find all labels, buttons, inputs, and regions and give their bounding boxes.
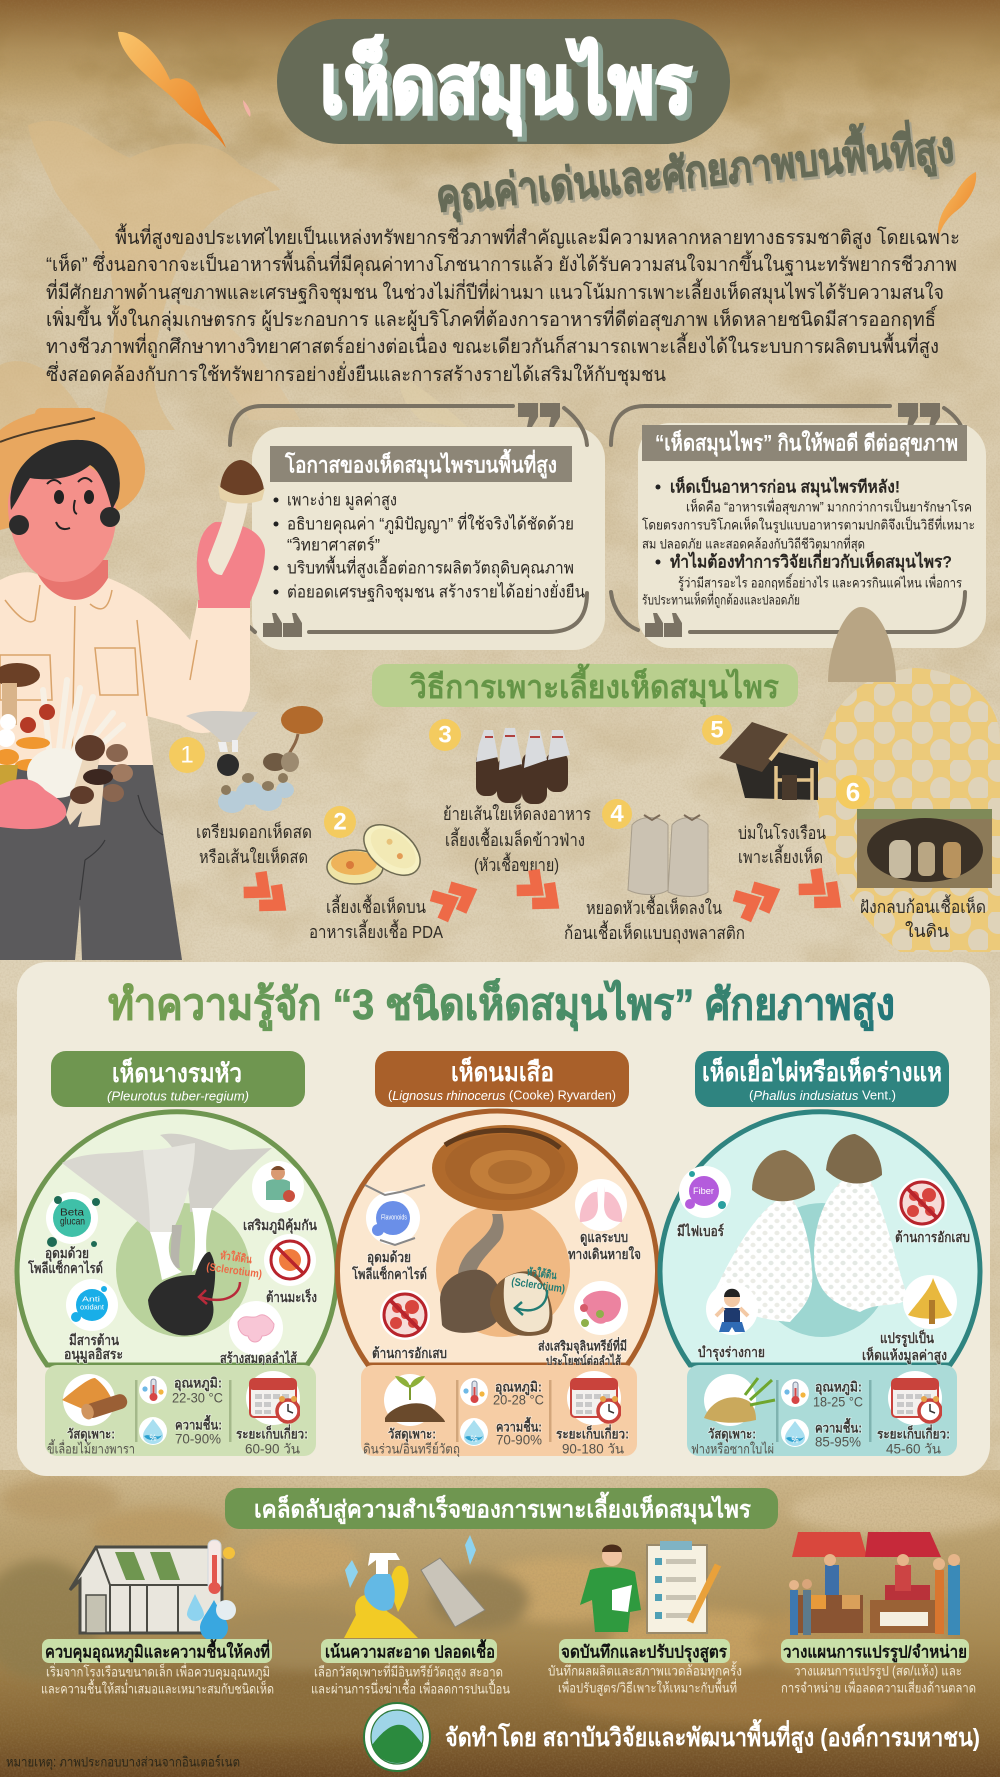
arrow 5	[799, 869, 843, 912]
number badge	[169, 737, 205, 773]
intro paragraph: ที่มีศักยภาพด้านสุขภาพและเศรษฐกิจชุมชน ในช่วงไม่กี่ปีที่ผ่านมา แนวโน้มการเพาะเลี้ยงเห็ดสมุนไพรได้รับความสนใจ	[46, 278, 944, 305]
benefit: antioxidant: มีสารต้าน	[69, 1332, 119, 1348]
tip 3: records	[548, 1541, 742, 1696]
quote marks bottom	[645, 613, 682, 637]
panel heading	[642, 425, 967, 461]
humidity	[781, 1418, 862, 1450]
number badge	[602, 799, 632, 829]
trousers	[0, 765, 182, 960]
sclerotium label: (Sclerotium)	[511, 1276, 566, 1296]
step 4	[564, 799, 745, 944]
benefit: antioxidant: อนุมูลอิสระ	[64, 1346, 123, 1363]
card header	[695, 1051, 949, 1107]
sclerotium label: หัวใต้ดิน	[526, 1264, 558, 1282]
benefit: fiber: Fiber	[693, 1186, 714, 1196]
benefit: anti-inflammatory: ต้านการอักเสบ	[895, 1229, 970, 1245]
panel: three high-potential mushrooms	[17, 962, 990, 1476]
step label: (หัวเชื้อขยาย)	[474, 852, 559, 875]
benefit: antioxidant: oxidant	[80, 1304, 104, 1312]
harvest period	[877, 1371, 950, 1456]
bullet list: ต่อยอดเศรษฐกิจชุมชน สร้างรายได้อย่างยั่งยืน	[287, 580, 585, 602]
circle illustration	[17, 1112, 337, 1365]
benefit: polysaccharide: โพลีแซ็กคาไรด์	[351, 1265, 427, 1282]
step label: เลี้ยงเชื้อเมล็ดข้าวฟ่าง	[445, 827, 585, 850]
card header	[51, 1051, 305, 1107]
spawn bottles	[476, 728, 570, 804]
number badge: 5	[710, 716, 724, 744]
card: Lignosus rhinocerus	[338, 1051, 658, 1458]
method heading: วิธีการเพาะเลี้ยงเห็ดสมุนไพร	[409, 663, 779, 708]
substrate: ดินร่วน/อินทรีย์วัตถุ	[363, 1440, 460, 1458]
quote marks bottom	[263, 613, 302, 637]
step label: เพาะเลี้ยงเห็ด	[738, 844, 823, 867]
benefit: body nourishment	[698, 1283, 765, 1361]
humidity: ความชื้น:	[815, 1418, 862, 1436]
step label: หยอดหัวเชื้อเห็ดลงใน	[586, 895, 722, 918]
sclerotium label	[206, 1246, 265, 1281]
description: บันทึกผลผลิตและสภาพแวดล้อมทุกครั้ง	[548, 1660, 742, 1680]
growing conditions	[361, 1365, 637, 1458]
humidity: 70-90%	[496, 1432, 542, 1448]
temperature: 18-25 °C	[813, 1394, 863, 1410]
tip 4: market planning	[781, 1532, 976, 1696]
label: เน้นความสะอาด ปลอดเชื้อ	[325, 1638, 495, 1662]
icon: greenhouse	[70, 1540, 236, 1641]
description: และผ่านการนึ่งฆ่าเชื้อ เพื่อลดการปนเปื้อน	[311, 1678, 510, 1696]
title pill	[277, 19, 730, 144]
body text	[642, 474, 975, 608]
shirt	[0, 572, 250, 772]
panel heading	[270, 446, 572, 482]
benefit: anti-inflammatory	[372, 1290, 447, 1361]
description: วางแผนการแปรรูป (สด/แห้ง) และ	[794, 1664, 962, 1680]
panel: eat herbal mushrooms properly	[611, 403, 986, 682]
step label: อาหารเลี้ยงเชื้อ PDA	[309, 919, 443, 942]
harvest period: 60-90 วัน	[245, 1442, 300, 1456]
card: Phallus indusiatus	[660, 1051, 980, 1456]
growing conditions	[45, 1365, 316, 1456]
quote marks top	[518, 403, 560, 427]
benefit: antioxidant	[64, 1279, 123, 1363]
sclerotium label	[511, 1262, 568, 1296]
benefit: lungs	[568, 1179, 641, 1262]
step label	[564, 895, 745, 944]
step label	[309, 894, 443, 942]
temperature: อุณหภูมิ:	[174, 1376, 222, 1392]
bullet list: เพาะง่าย มูลค่าสูง	[287, 490, 397, 510]
benefit: polysaccharide: โพลีแซ็กคาไรด์	[27, 1259, 103, 1276]
benefit: gut microbes: ประโยชน์ต่อลำไส้	[546, 1352, 621, 1368]
benefit: polysaccharide: อุดมด้วย	[45, 1245, 89, 1262]
benefit: anti-inflammatory: ต้านการอักเสบ	[372, 1345, 447, 1361]
benefit: body nourishment: บำรุงร่างกาย	[698, 1344, 765, 1361]
circle illustration	[338, 1111, 658, 1365]
benefit: fiber: มีไฟเบอร์	[677, 1222, 724, 1239]
step label	[196, 821, 312, 867]
tips heading: เคล็ดลับสู่ความสำเร็จของการเพาะเลี้ยงเห็ดสมุนไพร	[254, 1490, 751, 1526]
tips heading	[225, 1488, 778, 1529]
step label: ฝังกลบก้อนเชื้อเห็ด	[860, 894, 986, 917]
step 6	[836, 775, 992, 941]
temperature: 22-30 °C	[172, 1390, 223, 1406]
spawn bags	[628, 815, 708, 896]
step label: ย้ายเส้นใยเห็ดลงอาหาร	[443, 803, 591, 824]
step label: ก้อนเชื้อเห็ดแบบถุงพลาสติก	[564, 920, 745, 944]
substrate: วัสดุเพาะ:	[67, 1426, 115, 1442]
step 2	[309, 806, 443, 942]
description: เพื่อปรับสูตร/วิธีเพาะให้เหมาะกับพื้นที่	[558, 1678, 737, 1696]
temperature: อุณหภูมิ:	[815, 1380, 862, 1396]
hand holding a mushroom	[197, 460, 265, 608]
bullet list: อธิบายคุณค่า “ภูมิปัญญา” ที่ใช้จริงได้ชัดด้วย	[287, 512, 574, 534]
decorative morel cap	[828, 607, 896, 682]
arrow 3	[517, 870, 561, 913]
step label: ในดิน	[905, 921, 949, 941]
arrow 2	[431, 881, 475, 920]
benefit: polysaccharide	[351, 1185, 427, 1282]
label: ควบคุมอุณหภูมิและความชื้นให้คงที่	[45, 1638, 270, 1664]
step label: เตรียมดอกเห็ดสด	[196, 821, 312, 842]
section heading: ทำความรู้จัก “3 ชนิดเห็ดสมุนไพร” ศักยภาพสูง	[108, 978, 895, 1032]
icon: market stalls	[789, 1532, 960, 1635]
temperature	[460, 1378, 544, 1408]
farmer character	[0, 408, 265, 960]
decorative orange leaves	[118, 32, 976, 240]
body text: สม ปลอดภัย และสอดคล้องกับวิถีชีวิตมากที่สุด	[642, 534, 865, 552]
description: และความชื้นให้สม่ำเสมอและเหมาะสมกับชนิดเห็ด	[41, 1678, 274, 1696]
benefit: anti-cancer: ต้านมะเร็ง	[266, 1288, 317, 1305]
humidity	[139, 1414, 222, 1446]
benefit: gut microbes	[538, 1281, 628, 1368]
harvest period	[556, 1371, 629, 1456]
intro paragraph: ซึ่งสอดคล้องกับการใช้ทรัพยากรอย่างยั่งยืนและการสร้างรายได้เสริมให้กับชุมชน	[46, 361, 666, 387]
description	[781, 1664, 976, 1696]
petri dishes	[327, 815, 430, 885]
sclerotium label: (Sclerotium)	[206, 1261, 263, 1281]
mushroom hut	[719, 722, 828, 800]
step label: เลี้ยงเชื้อเห็ดบน	[326, 894, 426, 917]
panel: mushroom opportunities	[230, 403, 605, 650]
step label	[738, 823, 826, 867]
benefit: anti-inflammatory	[895, 1178, 970, 1245]
step label: บ่มในโรงเรือน	[738, 823, 826, 843]
mushroom bouquet	[0, 663, 133, 829]
benefit: dried mushroom	[862, 1275, 957, 1364]
benefit: gut microbes: ส่งเสริมจุลินทรีย์ที่มี	[538, 1336, 627, 1354]
substrate: วัสดุเพาะ:	[388, 1426, 436, 1442]
benefit: polysaccharide	[27, 1192, 103, 1276]
step 5	[702, 715, 828, 867]
number badge	[702, 715, 732, 745]
circle illustration	[660, 1112, 980, 1365]
substrate: วัสดุเพาะ:	[708, 1426, 756, 1442]
decorative lattice mushroom at right	[816, 668, 1000, 952]
benefit: lungs: ดูแลระบบ	[580, 1229, 628, 1246]
harvest period: 45-60 วัน	[886, 1442, 941, 1456]
card header: เห็ดนมเสือ	[451, 1056, 554, 1087]
arrow 1	[244, 872, 288, 915]
quote frame	[611, 406, 965, 632]
main title: เห็ดสมุนไพร	[320, 34, 692, 136]
harvest period	[236, 1371, 308, 1456]
benefit: polysaccharide: อุดมด้วย	[367, 1249, 411, 1266]
benefit: immunity	[243, 1161, 317, 1234]
humidity: 70-90%	[175, 1432, 221, 1446]
body text: รับประทานเห็ดที่ถูกต้องและปลอดภัย	[642, 590, 800, 608]
arrow 4	[734, 881, 778, 920]
substrate	[691, 1374, 775, 1456]
step 3	[429, 719, 591, 875]
bullet list: “วิทยาศาสตร์”	[287, 536, 380, 554]
harvest period: ระยะเก็บเกี่ยว:	[236, 1424, 308, 1442]
logo	[364, 1703, 430, 1771]
benefit: polysaccharide: Flavonoids	[381, 1214, 407, 1222]
substrate	[47, 1374, 135, 1456]
label	[42, 1638, 272, 1664]
number badge: 4	[610, 800, 624, 828]
body text: ทำไมต้องทำการวิจัยเกี่ยวกับเห็ดสมุนไพร?	[670, 550, 952, 572]
growing conditions	[687, 1365, 957, 1456]
benefit: lungs: ทางเดินหายใจ	[568, 1245, 641, 1262]
substrate	[363, 1374, 460, 1458]
number badge: 2	[333, 808, 347, 836]
step label	[443, 803, 591, 875]
card header: (Pleurotus tuber-regium)	[107, 1088, 249, 1104]
panel heading: โอกาสของเห็ดสมุนไพรบนพื้นที่สูง	[284, 448, 557, 480]
bullet list: บริบทพื้นที่สูงเอื้อต่อการผลิตวัตถุดิบคุณภาพ	[287, 556, 574, 578]
card header	[375, 1051, 629, 1107]
benefit: antioxidant: Anti	[82, 1296, 101, 1304]
number badge	[836, 775, 870, 809]
description	[548, 1660, 742, 1696]
humidity: ความชื้น:	[496, 1416, 542, 1434]
number badge	[429, 719, 461, 751]
quote marks top	[898, 403, 940, 427]
icon: gloves, spray and bag	[344, 1535, 485, 1638]
temperature	[781, 1379, 863, 1410]
label	[321, 1638, 497, 1663]
sclerotium label: หัวใต้ดิน	[219, 1248, 253, 1266]
benefit: anti-cancer	[264, 1234, 317, 1305]
humidity	[460, 1416, 542, 1448]
harvest period: 90-180 วัน	[562, 1442, 624, 1456]
benefit: dried mushroom: แปรรูปเป็น	[880, 1329, 934, 1347]
main title: เห็ดสมุนไพร	[325, 40, 697, 140]
substrate: ขี้เลื่อยไม้ยางพารา	[47, 1438, 135, 1456]
number badge: 3	[438, 722, 452, 748]
footnote: หมายเหตุ: ภาพประกอบบางส่วนจากอินเตอร์เนต	[6, 1754, 240, 1770]
temperature	[139, 1376, 223, 1406]
icon: person with clipboard	[580, 1541, 718, 1633]
tip 2: cleanliness	[311, 1535, 510, 1696]
benefit: polysaccharide: Beta	[60, 1208, 85, 1218]
description: เริ่มจากโรงเรือนขนาดเล็ก เพื่อควบคุมอุณหภูมิ	[46, 1662, 270, 1680]
temperature: อุณหภูมิ:	[495, 1380, 542, 1396]
benefit: fiber	[677, 1166, 731, 1239]
card header: เห็ดเยื่อไผ่หรือเห็ดร่างแห	[702, 1053, 942, 1087]
intro paragraph	[46, 223, 960, 387]
label: วางแผนการแปรรูป/จำหน่าย	[783, 1642, 967, 1664]
bullet list	[274, 490, 585, 602]
card header: เห็ดนางรมหัว	[112, 1057, 242, 1088]
mushroom samples	[186, 706, 323, 813]
tip 1: climate control	[41, 1540, 274, 1696]
benefit: immunity: เสริมภูมิคุ้มกัน	[243, 1217, 317, 1234]
humidity: 85-95%	[815, 1434, 861, 1450]
benefit: dried mushroom: เห็ดแห้งมูลค่าสูง	[862, 1346, 947, 1364]
body text: เห็ดเป็นอาหารก่อน สมุนไพรทีหลัง!	[670, 474, 900, 498]
humidity: ความชื้น:	[175, 1414, 222, 1432]
step label: หรือเส้นใยเห็ดสด	[199, 846, 308, 867]
description: เลือกวัสดุเพาะที่มีอินทรีย์วัตถุสูง สะอาด	[314, 1662, 503, 1680]
label: จดบันทึกและปรับปรุงสูตร	[561, 1642, 728, 1664]
harvest period: ระยะเก็บเกี่ยว:	[877, 1424, 950, 1442]
intro paragraph: พื้นที่สูงของประเทศไทยเป็นแหล่งทรัพยากรชีวภาพที่สำคัญและมีความหลากหลายทางธรรมชาติสูง โดยเฉพาะ	[115, 223, 960, 250]
harvest period: ระยะเก็บเกี่ยว:	[556, 1424, 629, 1442]
benefit: polysaccharide: glucan	[60, 1216, 85, 1228]
benefit: gut balance: สร้างสมดุลลำไส้	[220, 1349, 297, 1367]
number badge: 6	[846, 777, 860, 807]
substrate: ฟางหรือซากใบไผ่	[691, 1440, 774, 1456]
intro paragraph: ทางชีวภาพที่ถูกศึกษาทางวิทยาศาสตร์อย่างต่อเนื่อง ขณะเดียวกันก็สามารถเพาะเลี้ยงได้ในระบบการผลิตบนพื้นที่สูง	[46, 332, 939, 359]
temperature: 20-28 °C	[493, 1392, 544, 1408]
description	[41, 1662, 274, 1696]
bottom tips background photo	[0, 1466, 1000, 1777]
number badge: 1	[180, 742, 194, 768]
intro paragraph: เพิ่มขึ้น ทั้งในกลุ่มเกษตรกร ผู้ประกอบการ และผู้บริโภคที่ต้องการอาหารที่ดีต่อสุขภาพ เห็ดหลายชนิดมีสารออกฤทธิ์	[46, 305, 938, 332]
benefit: gut balance	[220, 1301, 297, 1367]
buried bags photo	[857, 809, 992, 888]
card: Pleurotus tuber-regium	[17, 1051, 337, 1456]
step 1	[169, 706, 323, 867]
step label	[860, 894, 986, 941]
description	[311, 1662, 510, 1696]
card header: (Phallus indusiatus Vent.)	[749, 1088, 896, 1102]
quote frame	[230, 406, 587, 632]
card header: (Lignosus rhinocerus (Cooke) Ryvarden)	[388, 1088, 616, 1102]
